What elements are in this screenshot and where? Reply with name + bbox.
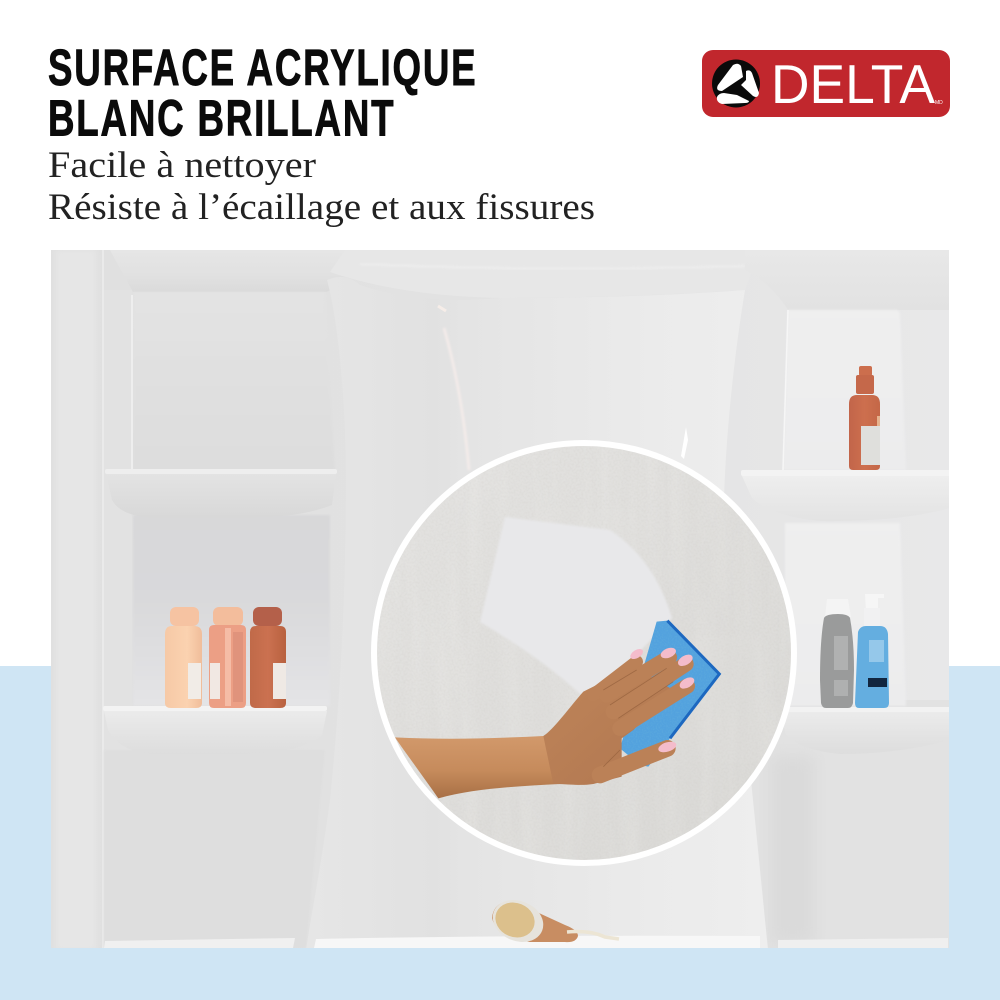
panel: right niche lower [785,523,906,706]
panel: left recess below lower shelf [104,750,325,948]
panel: shower wall photo [50,250,951,950]
top ledge centre [330,250,760,298]
text block: benefits [48,145,595,228]
shelf: right lower [788,707,949,714]
shelf: left lower [103,706,327,719]
bottle: blue cleanser [855,626,889,708]
background: light blue band [0,666,1000,1000]
bottle: translucent pink [209,607,246,708]
top ledge right [745,250,950,310]
bottom ledge [104,936,948,948]
icon: Delta triangle mark [712,60,760,108]
top ledge left [110,250,345,292]
panel: right lower recess [750,700,950,948]
icon: blue sponge [620,621,719,767]
ring: white circle outline [374,443,794,863]
texture: residue haze [374,443,794,863]
heading: SURFACE ACRYLIQUE [48,40,476,96]
icon: blue sponge and hand, drawn in zoom coordinates [395,621,719,798]
panel: zoom circle detail [374,443,794,863]
logo: Delta: MD [935,100,943,106]
reflection: clean glossy area [480,517,672,703]
icon: pink nails [629,646,696,754]
panel: right niche upper [788,311,874,398]
text block: benefits: Résiste à l’écaillage et aux fissures [48,187,595,228]
panel: left niche lower [134,516,329,604]
bottle: terracotta pump [849,366,880,470]
group: left bottles [165,607,286,708]
bottle: grey shampoo [820,614,854,708]
panel: left niche upper [133,292,335,470]
panel: centre recess [306,277,768,950]
left pilaster [56,250,96,950]
icon: arm and hand [395,657,687,798]
shelf: right upper [741,470,949,479]
shelf: left upper [105,469,337,518]
brush: wooden body brush [492,900,620,942]
heading: BLANC BRILLANT [48,91,394,147]
logo: Delta: DELTA [771,53,935,115]
text block: benefits: Facile à nettoyer [48,145,316,186]
logo: Delta [702,50,950,117]
heading [48,40,476,147]
bottle: terracotta [250,607,286,708]
bottle: peach [165,607,202,708]
